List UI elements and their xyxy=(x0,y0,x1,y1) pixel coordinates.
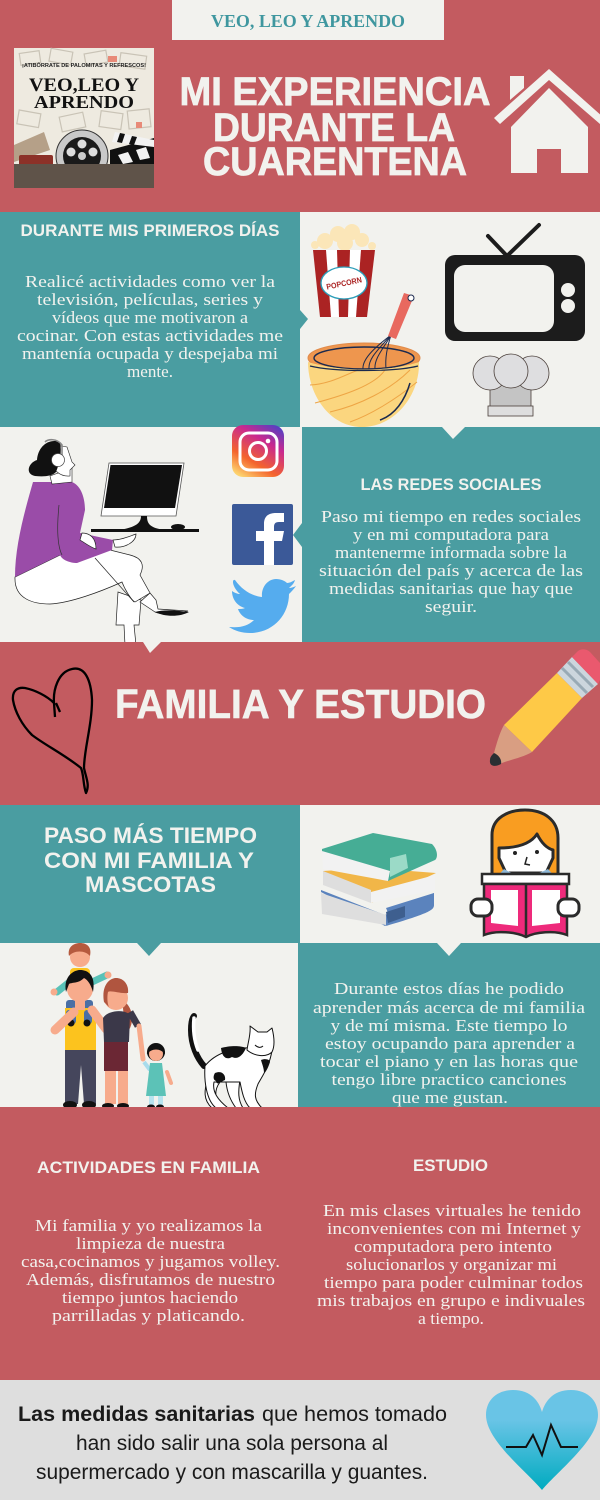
icon: facebook xyxy=(232,504,293,565)
arrow: pointer from panel above xyxy=(137,943,161,956)
text block: estudio: solucionarlos y organizar mi xyxy=(346,1255,557,1274)
text block: durante estos días: y de mí misma. Este tiempo lo xyxy=(330,1016,568,1035)
icon: stack of books xyxy=(321,833,437,926)
text block: estudio: inconvenientes con mi Internet y xyxy=(327,1219,582,1238)
arrow: pointer left xyxy=(293,523,302,547)
heading: paso más tiempo: PASO MÁS TIEMPO xyxy=(44,823,257,848)
text block: redes sociales: seguir. xyxy=(425,597,477,616)
icon: popcorn: POPCORN xyxy=(326,275,363,292)
text block: actividades en familia: casa,cocinamos y jugamos volley. xyxy=(21,1252,280,1271)
text block: estudio xyxy=(317,1201,585,1328)
text block: medidas sanitarias: Las medidas sanitarias xyxy=(18,1403,255,1426)
icon: heart with pulse xyxy=(486,1390,598,1490)
text block: actividades en familia: parrilladas y platicando. xyxy=(52,1306,245,1325)
heading: familia y estudio: FAMILIA Y ESTUDIO xyxy=(115,681,486,727)
text block: primeros días xyxy=(17,272,283,381)
arrow: notch from panel above xyxy=(437,943,461,956)
illustration: woman at computer xyxy=(15,440,199,648)
illustration: family xyxy=(50,943,171,1110)
heading: paso más tiempo xyxy=(44,823,257,897)
panel: familia y estudio banner xyxy=(0,642,600,805)
heading: estudio: ESTUDIO xyxy=(413,1156,488,1175)
panel: las redes sociales xyxy=(293,427,600,642)
panel: durante estos días xyxy=(298,943,600,1107)
poster image: Veo, Leo y Aprendo: APRENDO xyxy=(34,92,134,112)
text block: redes sociales: y en mi computadora para xyxy=(353,525,549,544)
icon: girl reading a book xyxy=(471,810,579,937)
title xyxy=(180,70,490,184)
text block: primeros días: cocinar. Con estas actividades me xyxy=(17,326,283,345)
heading: actividades en familia: ACTIVIDADES EN FAMILIA xyxy=(37,1158,260,1177)
icon: popcorn xyxy=(311,224,376,317)
panel: image of person at computer xyxy=(0,425,302,648)
text block: actividades en familia: Mi familia y yo realizamos la xyxy=(35,1216,263,1235)
icon: twitter xyxy=(229,579,296,633)
text block: estudio: tiempo para poder culminar todos xyxy=(324,1273,583,1292)
text block: redes sociales: situación del país y acerca de las xyxy=(319,561,583,580)
text block: primeros días: televisión, películas, series y xyxy=(37,290,264,309)
text block: primeros días: mente. xyxy=(127,362,173,381)
panel: header xyxy=(0,0,600,212)
panel: actividades y estudio xyxy=(0,1107,600,1380)
text block: actividades en familia: limpieza de nuestra xyxy=(76,1234,226,1253)
heading: primeros días: DURANTE MIS PRIMEROS DÍAS xyxy=(20,221,280,240)
title: DURANTE LA xyxy=(213,106,455,150)
text block: actividades en familia: tiempo juntos haciendo xyxy=(62,1288,238,1307)
top tab label: VEO, LEO Y APRENDO xyxy=(211,11,405,31)
panel: icons of first days xyxy=(300,212,600,427)
icon: chef hat xyxy=(473,354,549,416)
text block: medidas sanitarias: supermercado y con mascarilla y guantes. xyxy=(36,1461,428,1484)
poster image: Veo, Leo y Aprendo: VEO,LEO Y xyxy=(29,75,139,96)
heading: redes sociales: LAS REDES SOCIALES xyxy=(360,475,542,494)
icon: pencil xyxy=(490,649,600,766)
icon: house xyxy=(494,69,600,173)
text block: redes sociales: medidas sanitarias que hay que xyxy=(329,579,573,598)
text block: redes sociales xyxy=(319,507,583,616)
title: CUARENTENA xyxy=(203,140,467,184)
text block: durante estos días: tengo libre practico canciones xyxy=(332,1070,566,1089)
text block: estudio: computadora pero intento xyxy=(354,1237,552,1256)
icon: mixing bowl and whisk xyxy=(308,293,420,427)
poster image: Veo, Leo y Aprendo: ¡ATIBÓRRATE DE PALOMITAS Y REFRESCOS! xyxy=(22,61,146,69)
title: MI EXPERIENCIA xyxy=(180,70,490,114)
icon: television xyxy=(445,225,585,341)
arrow: notch from panel above xyxy=(143,642,161,653)
text block: medidas sanitarias: que hemos tomado xyxy=(262,1403,447,1426)
icon: instagram xyxy=(232,425,284,477)
text block: primeros días: mantenía ocupada y despejaba mi xyxy=(22,344,278,363)
arrow: pointer right xyxy=(300,310,308,329)
text block: durante estos días xyxy=(313,979,586,1107)
panel: paso más tiempo xyxy=(0,805,300,943)
panel: family and cat illustration xyxy=(0,943,298,1110)
arrow: notch from panel above xyxy=(442,427,465,439)
text block: primeros días: vídeos que me motivaron a xyxy=(52,308,248,327)
panel: books and reading girl xyxy=(300,805,600,943)
top tab label xyxy=(172,0,444,40)
text block: medidas sanitarias: han sido salir una sola persona al xyxy=(76,1432,388,1455)
text block: estudio: mis trabajos en grupo e indivuales xyxy=(317,1291,585,1310)
text block: durante estos días: estoy ocupando para aprender a xyxy=(325,1034,576,1053)
text block: actividades en familia xyxy=(21,1216,280,1325)
text block: estudio: En mis clases virtuales he tenido xyxy=(323,1201,581,1220)
text block: redes sociales: Paso mi tiempo en redes sociales xyxy=(321,507,581,526)
text block: primeros días: Realicé actividades como ver la xyxy=(25,272,276,291)
panel: medidas sanitarias footer xyxy=(0,1380,600,1500)
heading: paso más tiempo: CON MI FAMILIA Y xyxy=(44,848,254,873)
panel: durante mis primeros días xyxy=(0,212,300,427)
text block: redes sociales: mantenerme informada sobre la xyxy=(335,543,567,562)
heading: paso más tiempo: MASCOTAS xyxy=(85,872,216,897)
text block: estudio: a tiempo. xyxy=(418,1309,484,1328)
illustration: cat xyxy=(191,1016,274,1108)
text block: durante estos días: Durante estos días he podido xyxy=(334,979,564,998)
text block: medidas sanitarias xyxy=(18,1403,447,1484)
poster image: Veo, Leo y Aprendo xyxy=(14,48,154,188)
text block: actividades en familia: Además, disfrutamos de nuestro xyxy=(26,1270,275,1289)
text block: durante estos días: que me gustan. xyxy=(392,1088,508,1107)
icon: hand-drawn heart xyxy=(13,669,92,793)
text block: durante estos días: tocar el piano y en las horas que xyxy=(320,1052,578,1071)
text block: durante estos días: aprender más acerca de mi familia xyxy=(313,998,586,1017)
